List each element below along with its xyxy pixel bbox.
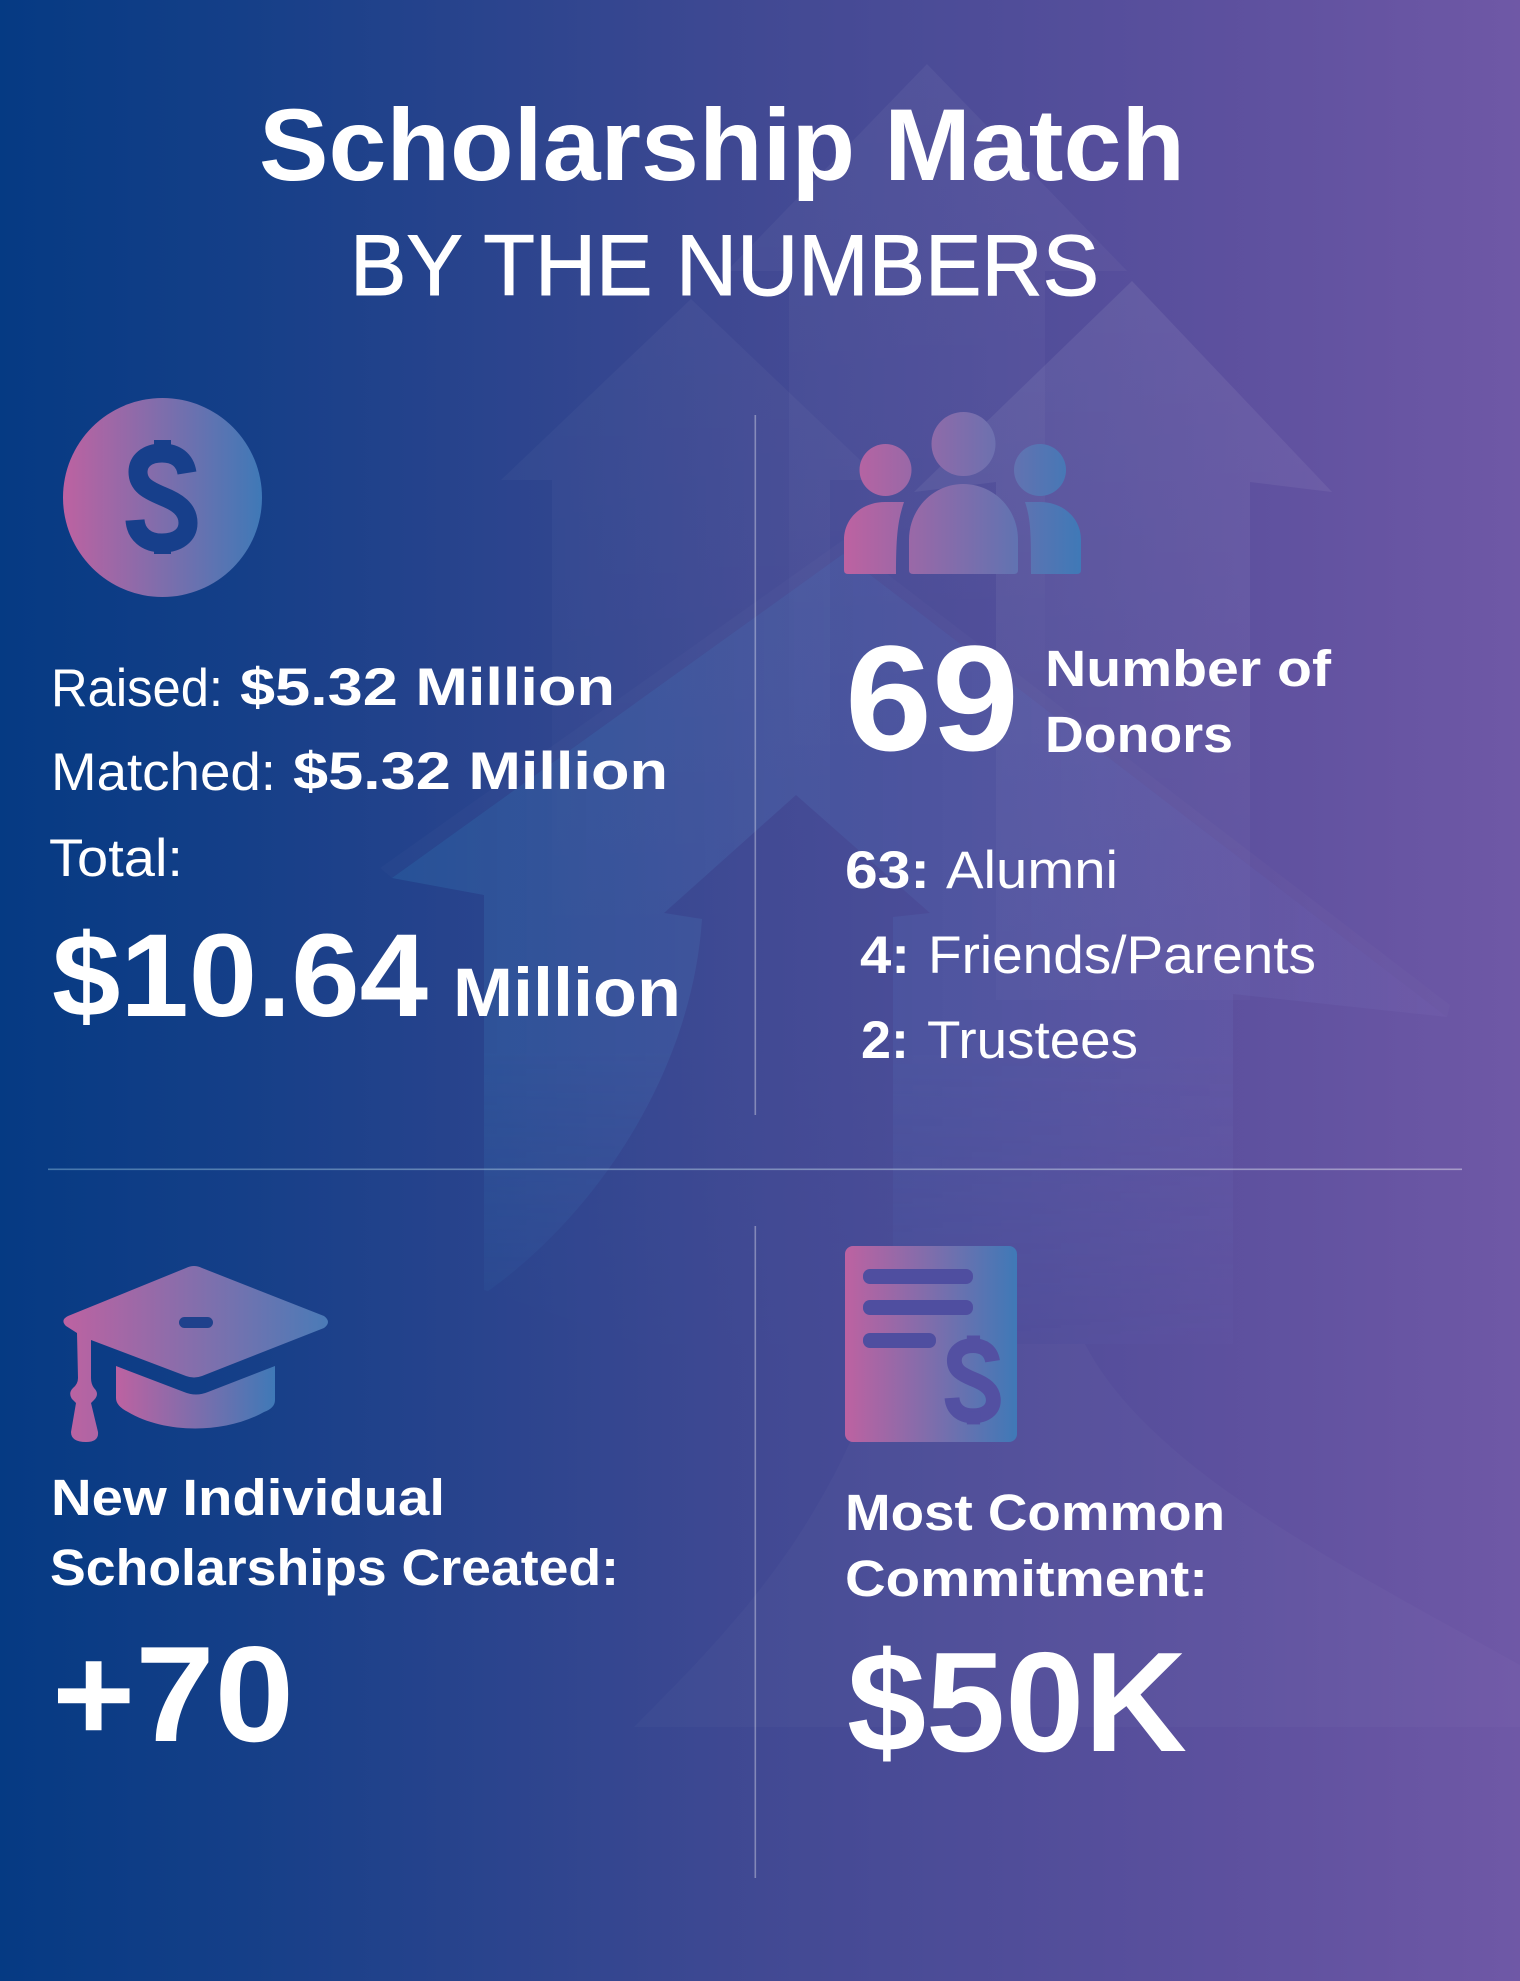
text: matched: Matched: — [51, 743, 276, 802]
text: raised: Raised: — [51, 659, 223, 718]
icon: dollar coin — [63, 398, 262, 597]
text: raised — [51, 658, 615, 718]
text: most common commitment — [845, 1484, 1225, 1607]
icon: document with dollar — [845, 1246, 1017, 1442]
text: total value: Million — [453, 954, 681, 1031]
text: most common commitment: Most Common — [845, 1484, 1225, 1541]
text: alumni — [845, 841, 1118, 900]
text: total value — [52, 910, 681, 1042]
text: new individual scholarships — [50, 1469, 619, 1596]
text: trustees: 2: — [861, 1011, 909, 1070]
text: alumni: Alumni — [946, 841, 1118, 900]
text: matched: $5.32 Million — [293, 742, 668, 801]
title — [259, 88, 1185, 314]
text: number of donors: Donors — [1045, 706, 1233, 763]
text: raised: $5.32 Million — [240, 658, 615, 717]
text: most common commitment: Commitment: — [845, 1550, 1208, 1607]
text: number of donors — [1045, 640, 1332, 763]
divider: vertical bottom — [754, 1226, 756, 1878]
stat: +70: +70 — [52, 1618, 294, 1770]
panel: most common commitment — [845, 1246, 1225, 1782]
panel: donors — [844, 412, 1332, 1070]
stat: 69: 69 — [845, 614, 1019, 782]
divider: horizontal — [48, 1168, 1462, 1170]
text: new individual scholarships: Scholarships Created: — [50, 1539, 619, 1596]
text: friends and parents: Friends/Parents — [928, 926, 1316, 985]
text: friends and parents: 4: — [860, 926, 910, 985]
divider: vertical top — [754, 415, 756, 1115]
text: alumni: 63: — [845, 841, 930, 900]
panel: new scholarships — [50, 1266, 619, 1770]
text: number of donors: Number of — [1045, 640, 1332, 697]
text: trustees: Trustees — [927, 1011, 1138, 1070]
text: new individual scholarships: New Individual — [51, 1469, 445, 1526]
subtitle: BY THE NUMBERS — [350, 218, 1099, 314]
title: Scholarship Match — [259, 88, 1185, 202]
icon: people group — [844, 412, 1081, 574]
stat: $50K: $50K — [847, 1623, 1187, 1782]
icon: graduation cap — [63, 1266, 328, 1442]
panel: funds raised — [49, 398, 681, 1042]
background arrows — [392, 282, 1331, 1224]
text: total value: $10.64 — [52, 910, 428, 1042]
text: total label: Total: — [49, 829, 183, 888]
text: matched — [51, 742, 668, 802]
